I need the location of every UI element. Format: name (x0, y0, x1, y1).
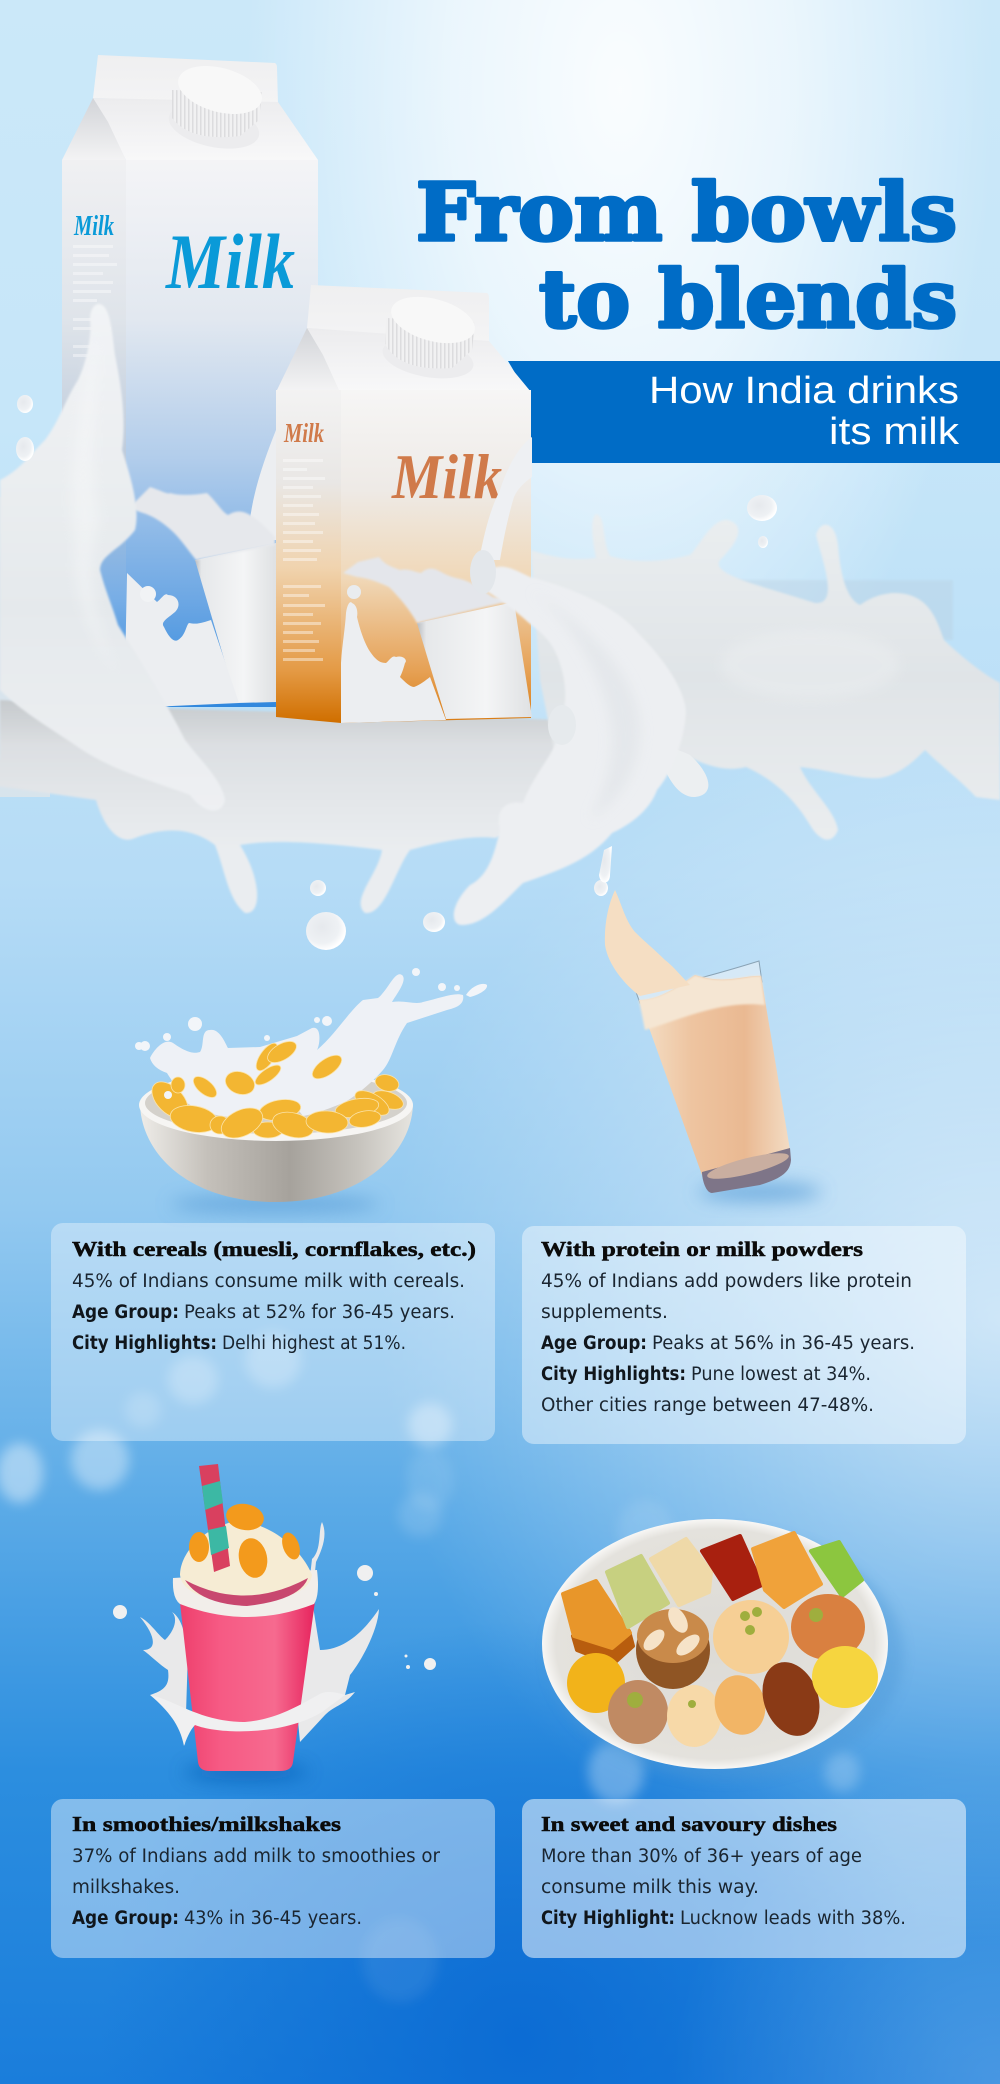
title: From bowls (416, 165, 957, 259)
body text: Age Group: (541, 1333, 647, 1354)
cup shadow (184, 1763, 308, 1781)
title: to blends (539, 252, 957, 346)
bowl body (140, 1105, 413, 1202)
milk splash: left swirl (0, 304, 225, 811)
milk carton: orange (front) (276, 285, 532, 723)
illustration: glass of protein milk (605, 890, 822, 1202)
pour stream (479, 437, 532, 560)
title (416, 165, 957, 346)
panel: with cereals (51, 1223, 495, 1441)
panel background (522, 1799, 966, 1958)
body text: milkshakes. (72, 1877, 180, 1898)
bottle cap (379, 289, 480, 385)
subtitle: How India drinks (649, 370, 959, 412)
striped straw (199, 1464, 230, 1572)
glass shadow (698, 1182, 822, 1202)
body text: supplements. (541, 1302, 668, 1323)
nuts (640, 1604, 703, 1659)
milk carton: blue (back) (62, 55, 318, 712)
body text: Age Group: (72, 1908, 179, 1929)
body text: 45% of Indians add powders like protein (541, 1271, 912, 1292)
bowl shadow (170, 1195, 380, 1213)
body text: Age Group: (72, 1302, 179, 1323)
body text: Lucknow leads with 38%. (680, 1908, 906, 1929)
panel background (51, 1799, 495, 1958)
back carton pour stream (248, 430, 276, 540)
cup lid dome (173, 1570, 318, 1617)
carton roof seal (93, 55, 278, 104)
milk splash (150, 974, 463, 1117)
body text: 45% of Indians consume milk with cereals. (72, 1271, 465, 1292)
cup body (179, 1594, 316, 1771)
small Milk label: Milk (283, 418, 324, 448)
glass base (702, 1148, 791, 1193)
body text: Peaks at 52% for 36-45 years. (184, 1302, 455, 1323)
body text: 43% in 36-45 years. (184, 1908, 362, 1929)
panel background (51, 1223, 495, 1441)
panel: in smoothies/milkshakes (51, 1799, 495, 1958)
illustration: plate of sweets (542, 1519, 903, 1780)
heading: With protein or milk powders (541, 1237, 863, 1261)
illustration: cereal bowl with milk splash (135, 968, 487, 1213)
body text (541, 1846, 906, 1929)
carton roof seal (307, 285, 489, 343)
body text: Other cities range between 47-48%. (541, 1395, 874, 1416)
milk pool (0, 700, 565, 913)
body text: Delhi highest at 51%. (222, 1333, 406, 1354)
big Milk label: Milk (391, 441, 502, 512)
subtitle: its milk (829, 411, 960, 453)
heading: In smoothies/milkshakes (72, 1812, 341, 1836)
glass contents (639, 975, 790, 1175)
body text: City Highlights: (72, 1333, 217, 1354)
cup splash (343, 557, 514, 623)
body text: Peaks at 56% in 36-45 years. (652, 1333, 915, 1354)
title band (508, 361, 1000, 463)
faint milk backdrop artefact (0, 497, 953, 797)
bokeh light circles (0, 1332, 860, 2002)
cup (417, 602, 532, 719)
plate shadow (547, 1530, 903, 1780)
body text (72, 1846, 440, 1929)
splash droplets (135, 968, 487, 1099)
bottle cap (165, 58, 267, 156)
round sweets (636, 1611, 710, 1689)
big Milk label: Milk (164, 218, 295, 305)
body text (541, 1271, 915, 1416)
panel background (522, 1226, 966, 1444)
milk band (150, 1692, 345, 1746)
side panel lorem (283, 459, 325, 661)
milk splash: right wing (531, 514, 1000, 840)
milk splash: right swirl (454, 550, 686, 925)
side milk splash (140, 1612, 188, 1745)
bowl rim (139, 1069, 413, 1141)
body text (72, 1271, 465, 1354)
heading: With cereals (muesli, cornflakes, etc.) (72, 1237, 476, 1261)
carton faces (276, 390, 341, 723)
peaches (189, 1501, 303, 1580)
milk drops (16, 395, 777, 950)
body text: 37% of Indians add milk to smoothies or (72, 1846, 440, 1867)
side panel lorem (73, 245, 117, 357)
body text: consume milk this way. (541, 1877, 759, 1898)
cornflakes (145, 1037, 406, 1144)
subtitle (649, 370, 960, 453)
glass rim (636, 961, 762, 1003)
plate (542, 1519, 888, 1769)
body text: City Highlights: (541, 1364, 686, 1385)
droplets (113, 1565, 436, 1670)
body text: City Highlight: (541, 1908, 675, 1929)
body text: Pune lowest at 34%. (691, 1364, 871, 1385)
panel: in sweet and savoury dishes (522, 1799, 966, 1958)
back carton cup and splash (125, 487, 276, 707)
carton faces (62, 160, 126, 712)
pouring splash (605, 890, 690, 996)
square sweets (563, 1533, 862, 1664)
panel: with protein or milk powders (522, 1226, 966, 1444)
small Milk label: Milk (73, 211, 114, 242)
whipped cream (180, 1522, 312, 1602)
body text: More than 30% of 36+ years of age (541, 1846, 862, 1867)
heading: In sweet and savoury dishes (541, 1812, 837, 1836)
illustration: smoothie cup (113, 1464, 436, 1781)
